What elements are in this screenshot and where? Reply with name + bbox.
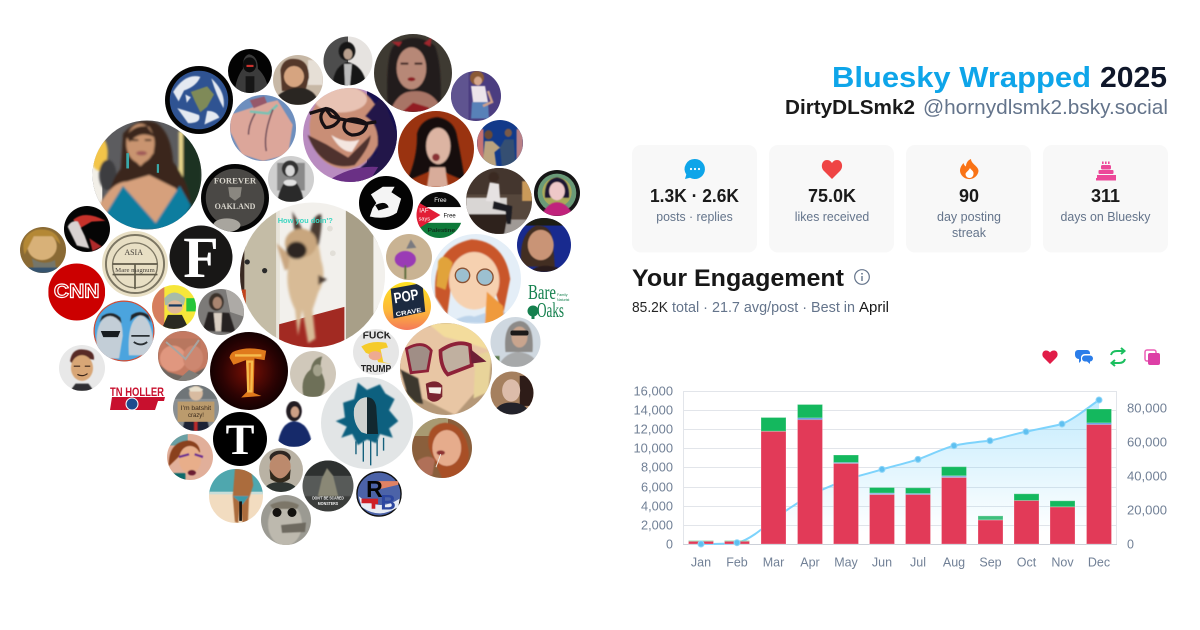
month labels: Dec: [1088, 556, 1110, 570]
avatar: redhead anime with glasses: [431, 234, 521, 324]
avatar: Bare Oaks logo: Family: [557, 293, 568, 297]
cumulative area: [701, 400, 1099, 544]
stacked bars: [688, 404, 1112, 544]
avatar: blue ink portrait: [321, 377, 413, 469]
engagement summary: 85.2K: [632, 300, 668, 316]
icon: flame: [960, 159, 978, 179]
avatar: anime character on pride colors: [152, 285, 196, 329]
left axis labels: 6,000: [641, 480, 673, 494]
avatar: Palestine flag: says: [419, 217, 430, 223]
avatar: owl with sunglasses: [261, 495, 311, 545]
avatar: gray-haired woman with sunglasses: [490, 317, 540, 367]
avatar: Forever Oakland: FOREVER: [214, 177, 256, 186]
avatar: blonde selfie: [20, 227, 66, 273]
month labels: Jun: [872, 556, 892, 570]
avatar: TN Holler logo: [110, 385, 165, 410]
avatar: Fuck Trump sticker: FUCK: [363, 331, 392, 342]
handle line: [785, 97, 1168, 119]
right axis labels: 0: [1127, 538, 1134, 552]
left axis labels: 14,000: [634, 404, 673, 418]
left axis labels: 0: [666, 538, 673, 552]
avatar: woman in teal dress: [92, 120, 202, 230]
avatar: comic woman: [167, 434, 213, 480]
avatar: rainbow cartoon girl: [534, 170, 580, 216]
avatar: Trump with sign: [173, 385, 219, 431]
month labels: [691, 556, 1110, 570]
avatar: Forbes F logo: [170, 226, 232, 288]
avatar: Forever Oakland: [201, 164, 269, 232]
bars: Nov: [1050, 501, 1075, 544]
avatar: Palestine flag: Free: [434, 198, 447, 204]
avatar: man in suit: [324, 36, 372, 86]
avatar: bearded man portrait: [259, 448, 303, 492]
icon: cake: [1096, 162, 1116, 180]
month labels: Feb: [726, 556, 748, 570]
avatar: Bare Oaks logo: Oaks: [537, 298, 564, 322]
avatar: woman in bedroom: [466, 168, 532, 234]
right axis labels: 40,000: [1127, 470, 1167, 484]
avatar: woman in white t-shirt: [451, 71, 501, 121]
bars: May: [834, 455, 858, 544]
avatar: woman with red glasses: [400, 323, 492, 415]
avatar: New York Times logo: T: [226, 417, 255, 464]
avatar: ship logo: [359, 176, 413, 230]
avatar: earth: [165, 66, 233, 134]
bars: Jan: [688, 541, 714, 544]
avatar: CNN logo: CNN: [54, 281, 100, 303]
right axis labels: 80,000: [1127, 402, 1167, 416]
stat card: likes: [769, 145, 894, 252]
left axis labels: 10,000: [634, 442, 673, 456]
stat card: days on Bluesky: 311: [1091, 186, 1120, 206]
avatar: smiling man with glasses: [303, 88, 397, 182]
chart grid: [683, 391, 1117, 544]
avatar: Bare Oaks logo: Naturist: [557, 298, 569, 302]
avatar: Palestine flag: [416, 192, 462, 238]
avatar: beach photo: [209, 469, 263, 523]
avatar: hooded figure: [228, 49, 272, 93]
engagement summary: total · 21.7 avg/post · Best in: [672, 300, 855, 316]
handle line: DirtyDLSmk2: [785, 97, 915, 119]
avatar: Palestine flag: Free: [443, 213, 456, 219]
month labels: Apr: [800, 556, 820, 570]
stat card: posts and replies: posts · replies: [656, 210, 733, 224]
bars: Oct: [1014, 494, 1039, 544]
stat card: streak: [906, 145, 1031, 252]
stat card: streak: streak: [952, 226, 987, 240]
chart legend icons: [1042, 348, 1160, 366]
chart: engagement by month: [634, 384, 1167, 570]
avatar: tower in storm: [302, 460, 354, 512]
month labels: Sep: [979, 556, 1002, 570]
avatar: flaming T: [210, 332, 288, 410]
icon: chat bubble: [685, 159, 705, 179]
avatar: woman in navy: [278, 401, 312, 447]
Jan and Feb points: [698, 540, 740, 547]
avatar: bearded man on couch: [198, 289, 244, 335]
month labels: May: [834, 556, 859, 570]
avatar: CNN logo: [48, 264, 106, 320]
heading: Your Engagement: Your Engagement: [632, 265, 844, 292]
avatar: purple thistle: [386, 234, 432, 280]
engagement summary: April: [859, 300, 889, 316]
avatar: Fuck Trump sticker: TRUMP: [361, 364, 391, 375]
stat card: posts and replies: [632, 145, 757, 252]
left axis labels: 2,000: [641, 518, 673, 532]
avatar: cartoon man: [59, 345, 105, 391]
avatar: tower in storm: MONSTERS: [318, 501, 338, 506]
right axis labels: [1127, 402, 1167, 552]
avatar: Trump with sign: crazy!: [188, 413, 204, 419]
left axis labels: 16,000: [634, 384, 673, 398]
title: Bluesky Wrapped: [832, 62, 1091, 94]
cumulative points: [879, 397, 1102, 472]
icon: heart: [822, 160, 842, 179]
avatar: Trump with sign: I'm batshit: [181, 406, 212, 412]
month labels: Oct: [1017, 556, 1037, 570]
right axis labels: 20,000: [1127, 504, 1167, 518]
bars: Sep: [978, 516, 1003, 544]
avatar: Pop Crave logo: [383, 282, 431, 330]
stat card: likes: likes received: [795, 210, 869, 224]
avatar: antique seal: [102, 231, 168, 297]
title: 2025: [1100, 62, 1167, 94]
bars: Mar: [761, 418, 786, 544]
avatar: woman on red background: [398, 111, 474, 187]
avatar: dog photo with caption: [240, 202, 385, 348]
avatar: TN Holler logo: TN HOLLER: [110, 385, 164, 399]
icon: quotes legend: [1145, 350, 1160, 365]
avatar: New York Times logo: [213, 412, 267, 466]
avatar: Forbes F logo: F: [183, 225, 219, 290]
avatar: black and white portrait: [268, 156, 314, 202]
icon: likes legend: [1042, 350, 1058, 364]
avatar: body with swimsuit: [230, 95, 296, 161]
avatar: tower in storm: DON'T BE SCARED: [312, 495, 344, 500]
handle line: @hornydlsmk2.bsky.social: [923, 97, 1168, 119]
avatar: Bare Oaks logo: Bare: [528, 280, 556, 304]
stat card: likes: 75.0K: [808, 186, 856, 206]
avatar: Bare Oaks logo: [528, 280, 569, 322]
avatar: Fuck Trump sticker: [353, 329, 399, 375]
month labels: Aug: [943, 556, 965, 570]
avatar: devil woman: [374, 34, 452, 112]
left axis labels: 8,000: [641, 460, 673, 474]
avatar: sepia engraving: [290, 351, 336, 397]
month labels: Jul: [910, 556, 926, 570]
avatar: dog photo with caption: How you doin'?: [278, 216, 333, 225]
avatar: antique seal: Mare magnum: [115, 268, 155, 274]
left axis labels: 4,000: [641, 500, 673, 514]
avatar: RB logo: R: [366, 476, 383, 502]
bars: Jul: [906, 488, 930, 544]
bars: Apr: [798, 404, 822, 544]
avatar: woman with brown hair: [273, 55, 323, 105]
left axis labels: 12,000: [634, 422, 673, 436]
month labels: Mar: [763, 556, 784, 570]
cumulative line: [701, 400, 1099, 544]
avatar: Palestine flag: IAF: [419, 209, 429, 215]
bars: Aug: [942, 467, 966, 544]
month labels: Jan: [691, 556, 711, 570]
avatar: girl on blue: [517, 218, 571, 272]
stat card: days on Bluesky: days on Bluesky: [1060, 210, 1151, 224]
icon: reposts legend: [1111, 348, 1125, 366]
avatar: two men with sunglasses: [94, 300, 154, 362]
avatar: Pop Crave logo: POP: [393, 287, 420, 307]
avatar: Forever Oakland: OAKLAND: [215, 202, 255, 211]
stat card: streak: 90: [959, 186, 979, 206]
stat card: streak: day posting: [937, 210, 1001, 224]
avatar: bald man: [490, 372, 534, 414]
month labels: Nov: [1051, 556, 1074, 570]
bars: Dec: [1086, 409, 1112, 544]
right axis labels: 60,000: [1127, 436, 1167, 450]
avatar: RB logo: B: [381, 492, 396, 515]
avatar: Palestine flag: Palestine: [428, 228, 455, 234]
avatar: antique seal: ASIA: [124, 248, 143, 257]
stat card: posts and replies: 1.3K · 2.6K: [650, 186, 739, 206]
stat card: days on Bluesky: [1043, 145, 1168, 252]
bars: Jun: [870, 488, 894, 544]
icon: replies legend: [1075, 350, 1093, 364]
left axis labels: [634, 384, 673, 552]
avatar: jester illustration: [64, 206, 110, 252]
bars: Feb: [724, 541, 750, 544]
avatar: thong photo: [158, 331, 208, 381]
avatar: Pop Crave logo: CRAVE: [395, 307, 422, 318]
avatar: Kamala handshake: [477, 120, 523, 166]
avatar: RB logo: [356, 471, 402, 517]
avatar: redhead photo: [412, 418, 472, 478]
icon: info: [855, 270, 869, 284]
avatar bubble cluster: [20, 34, 580, 546]
